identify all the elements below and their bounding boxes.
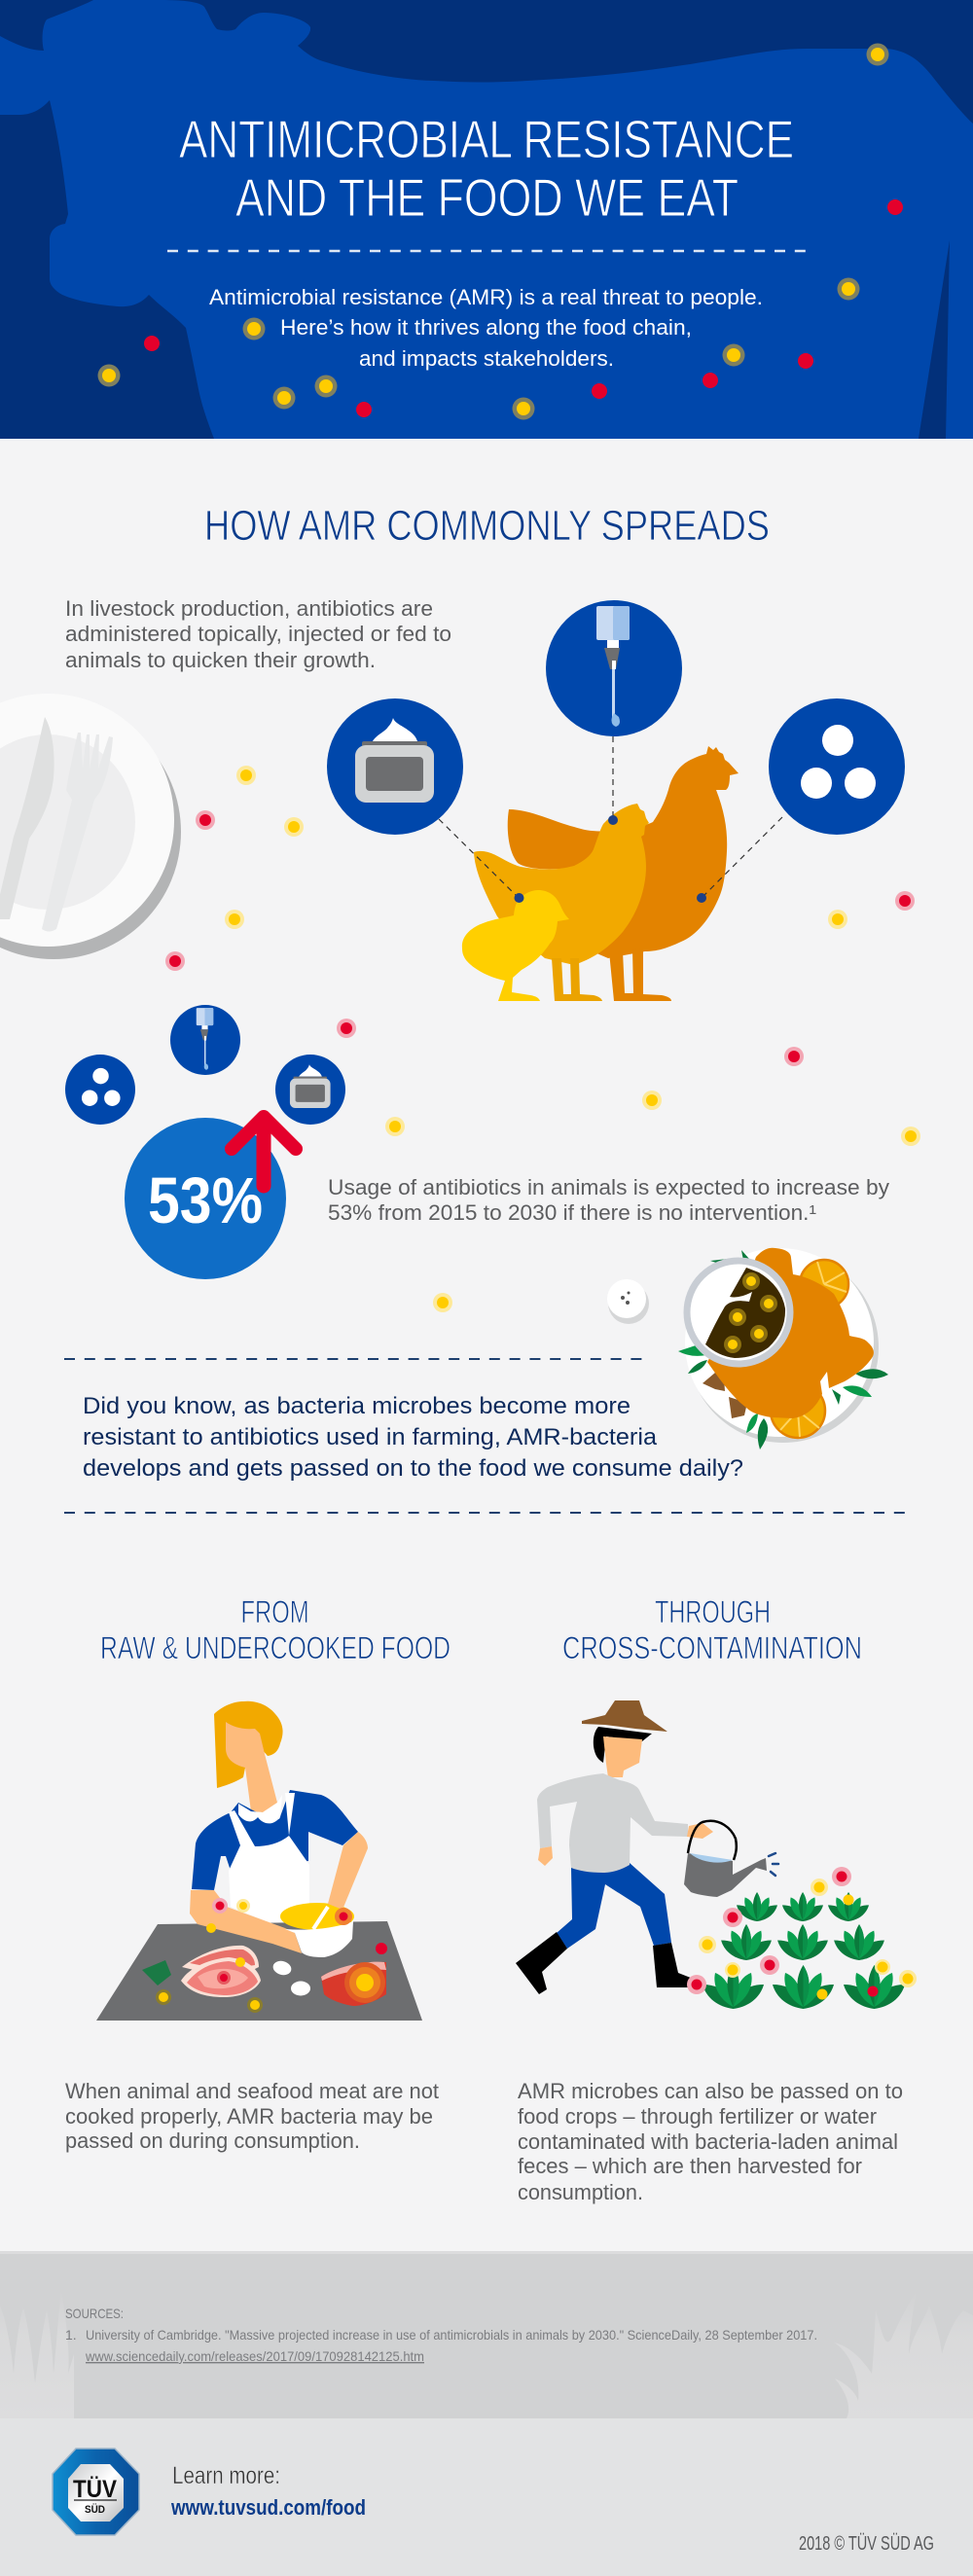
text: usage statistic: 53% from 2015 to 2030 if there is no intervention.¹ bbox=[328, 1200, 816, 1225]
text: raw food explanation: When animal and seafood meat are not bbox=[65, 2079, 439, 2103]
chick bbox=[462, 890, 569, 1001]
illustration: farmer watering crops bbox=[516, 1700, 917, 2009]
learn more text: Learn more: bbox=[172, 2462, 280, 2489]
eggs bbox=[271, 1959, 293, 1977]
heading: how AMR commonly spreads: HOW AMR COMMONLY SPREADS bbox=[204, 502, 770, 550]
mushrooms bbox=[703, 1373, 747, 1418]
title: AND THE FOOD WE EAT bbox=[235, 167, 739, 228]
herb leaf bbox=[142, 1960, 171, 1986]
icon: plate with cutlery bbox=[0, 694, 181, 959]
intro text: Here’s how it thrives along the food chain, bbox=[280, 315, 692, 340]
text: raw food explanation: cooked properly, AMR bacteria may be bbox=[65, 2104, 433, 2129]
hat bbox=[582, 1700, 667, 1732]
sources text: SOURCES: bbox=[65, 2306, 124, 2321]
right arm bbox=[328, 1832, 368, 1910]
text: cross-contamination explanation: consumption. bbox=[518, 2180, 643, 2204]
cavity ring bbox=[687, 1261, 790, 1364]
text: cross-contamination explanation: feces – which are then harvested for bbox=[518, 2154, 862, 2178]
grass decoration left bbox=[0, 2289, 74, 2418]
small injection icon bbox=[170, 1005, 240, 1075]
hen bbox=[474, 804, 649, 965]
table bbox=[96, 1921, 422, 2021]
header banner bbox=[0, 0, 973, 439]
illustration: woman preparing food bbox=[96, 1701, 422, 2021]
crop plants bbox=[703, 1892, 905, 2009]
cow silhouette bbox=[0, 0, 973, 439]
icon: salt shaker bbox=[607, 1279, 649, 1324]
collar bbox=[238, 1795, 282, 1823]
text: raw food explanation: passed on during consumption. bbox=[65, 2129, 360, 2153]
hands bbox=[538, 1846, 553, 1866]
bacteria dots on background bbox=[165, 766, 920, 1312]
panel: footer bbox=[0, 2418, 973, 2576]
heading: through cross-contamination: THROUGH bbox=[655, 1594, 771, 1629]
water drops bbox=[769, 1853, 778, 1876]
text: cross-contamination explanation: contaminated with bacteria-laden animal bbox=[518, 2129, 898, 2154]
intro text: Antimicrobial resistance (AMR) is a real threat to people. bbox=[209, 285, 763, 309]
panel: sources band bbox=[0, 2251, 973, 2418]
icon: injection circle bbox=[546, 600, 682, 736]
text: usage statistic bbox=[328, 1175, 889, 1225]
bacteria on scene bbox=[156, 1898, 387, 2013]
small cream icon bbox=[275, 1055, 345, 1125]
sources text: University of Cambridge. "Massive projected increase in use of antimicrobials in animals by 2030." ScienceDaily, 28 September 2017. bbox=[86, 2327, 817, 2343]
face and neck bbox=[603, 1736, 642, 1777]
red up arrow bbox=[232, 1117, 296, 1186]
raw meat slices bbox=[181, 1946, 261, 1997]
stuffing with bacteria bbox=[705, 1268, 785, 1358]
header bacteria dots bbox=[97, 43, 903, 420]
shirt bbox=[537, 1773, 688, 1873]
apron bbox=[229, 1793, 309, 1929]
text: did you know: Did you know, as bacteria microbes become more bbox=[83, 1393, 631, 1419]
heading: from raw and undercooked food: FROM bbox=[241, 1594, 309, 1629]
roast meat bbox=[321, 1962, 386, 2006]
rooster bbox=[508, 746, 739, 958]
pants bbox=[557, 1863, 671, 1949]
text: livestock production: administered topically, injected or fed to bbox=[65, 622, 451, 646]
text: usage statistic: Usage of antibiotics in animals is expected to increase by bbox=[328, 1175, 889, 1199]
stat group: 53 percent bbox=[65, 1005, 345, 1279]
boots bbox=[516, 1932, 567, 1994]
text: raw food explanation bbox=[65, 2079, 439, 2153]
turkey body bbox=[707, 1248, 874, 1418]
shirt bbox=[192, 1790, 358, 1890]
pointer lines bbox=[439, 736, 782, 898]
mixing bowl bbox=[280, 1903, 354, 1930]
text: cross-contamination explanation: AMR microbes can also be passed on to bbox=[518, 2079, 903, 2103]
text: cross-contamination explanation bbox=[518, 2079, 903, 2204]
heading: from raw and undercooked food: RAW & UNDERCOOKED FOOD bbox=[100, 1630, 450, 1665]
hair bbox=[594, 1727, 652, 1763]
53 percent value: 53% bbox=[148, 1164, 263, 1237]
grass decoration right bbox=[834, 2291, 973, 2418]
link: www.tuvsud.com/food bbox=[170, 2495, 366, 2520]
logo: TUV SUD: TÜV bbox=[73, 2475, 117, 2503]
logo: TUV SUD bbox=[53, 2449, 139, 2535]
oranges bbox=[771, 1260, 848, 1438]
title: ANTIMICROBIAL RESISTANCE bbox=[179, 109, 794, 169]
garnish leaves bbox=[678, 1250, 888, 1449]
left arm bbox=[190, 1890, 302, 1953]
text: livestock production: animals to quicken their growth. bbox=[65, 648, 376, 672]
text: did you know bbox=[83, 1393, 743, 1482]
title bbox=[179, 109, 794, 228]
intro text: and impacts stakeholders. bbox=[359, 346, 614, 371]
icon: topical cream circle bbox=[327, 698, 463, 835]
hair bbox=[214, 1701, 283, 1788]
watering can bbox=[684, 1821, 767, 1897]
text: did you know: resistant to antibiotics used in farming, AMR-bacteria bbox=[83, 1424, 658, 1450]
illustration: chickens bbox=[439, 736, 782, 1001]
bacteria on crops bbox=[687, 1867, 917, 2000]
heading: through cross-contamination: CROSS-CONTAMINATION bbox=[562, 1630, 862, 1665]
heading: through cross-contamination bbox=[562, 1594, 862, 1665]
illustration: roast turkey plate bbox=[678, 1248, 888, 1449]
icon: pills circle bbox=[769, 698, 905, 835]
sources text: 1. bbox=[65, 2327, 77, 2343]
text: livestock production bbox=[65, 596, 451, 672]
text: livestock production: In livestock production, antibiotics are bbox=[65, 596, 433, 621]
heading: from raw and undercooked food bbox=[100, 1594, 450, 1665]
small pills icon bbox=[65, 1055, 135, 1125]
sources text: www.sciencedaily.com/releases/2017/09/170928142125.htm bbox=[85, 2348, 424, 2364]
text: did you know: develops and gets passed on to the food we consume daily? bbox=[83, 1455, 743, 1482]
face and neck bbox=[226, 1722, 277, 1812]
sources text bbox=[65, 2306, 817, 2364]
text: cross-contamination explanation: food crops – through fertilizer or water bbox=[518, 2104, 877, 2129]
logo: TUV SUD: SÜD bbox=[85, 2503, 105, 2516]
intro text bbox=[209, 285, 763, 371]
big blue circle bbox=[125, 1118, 286, 1279]
